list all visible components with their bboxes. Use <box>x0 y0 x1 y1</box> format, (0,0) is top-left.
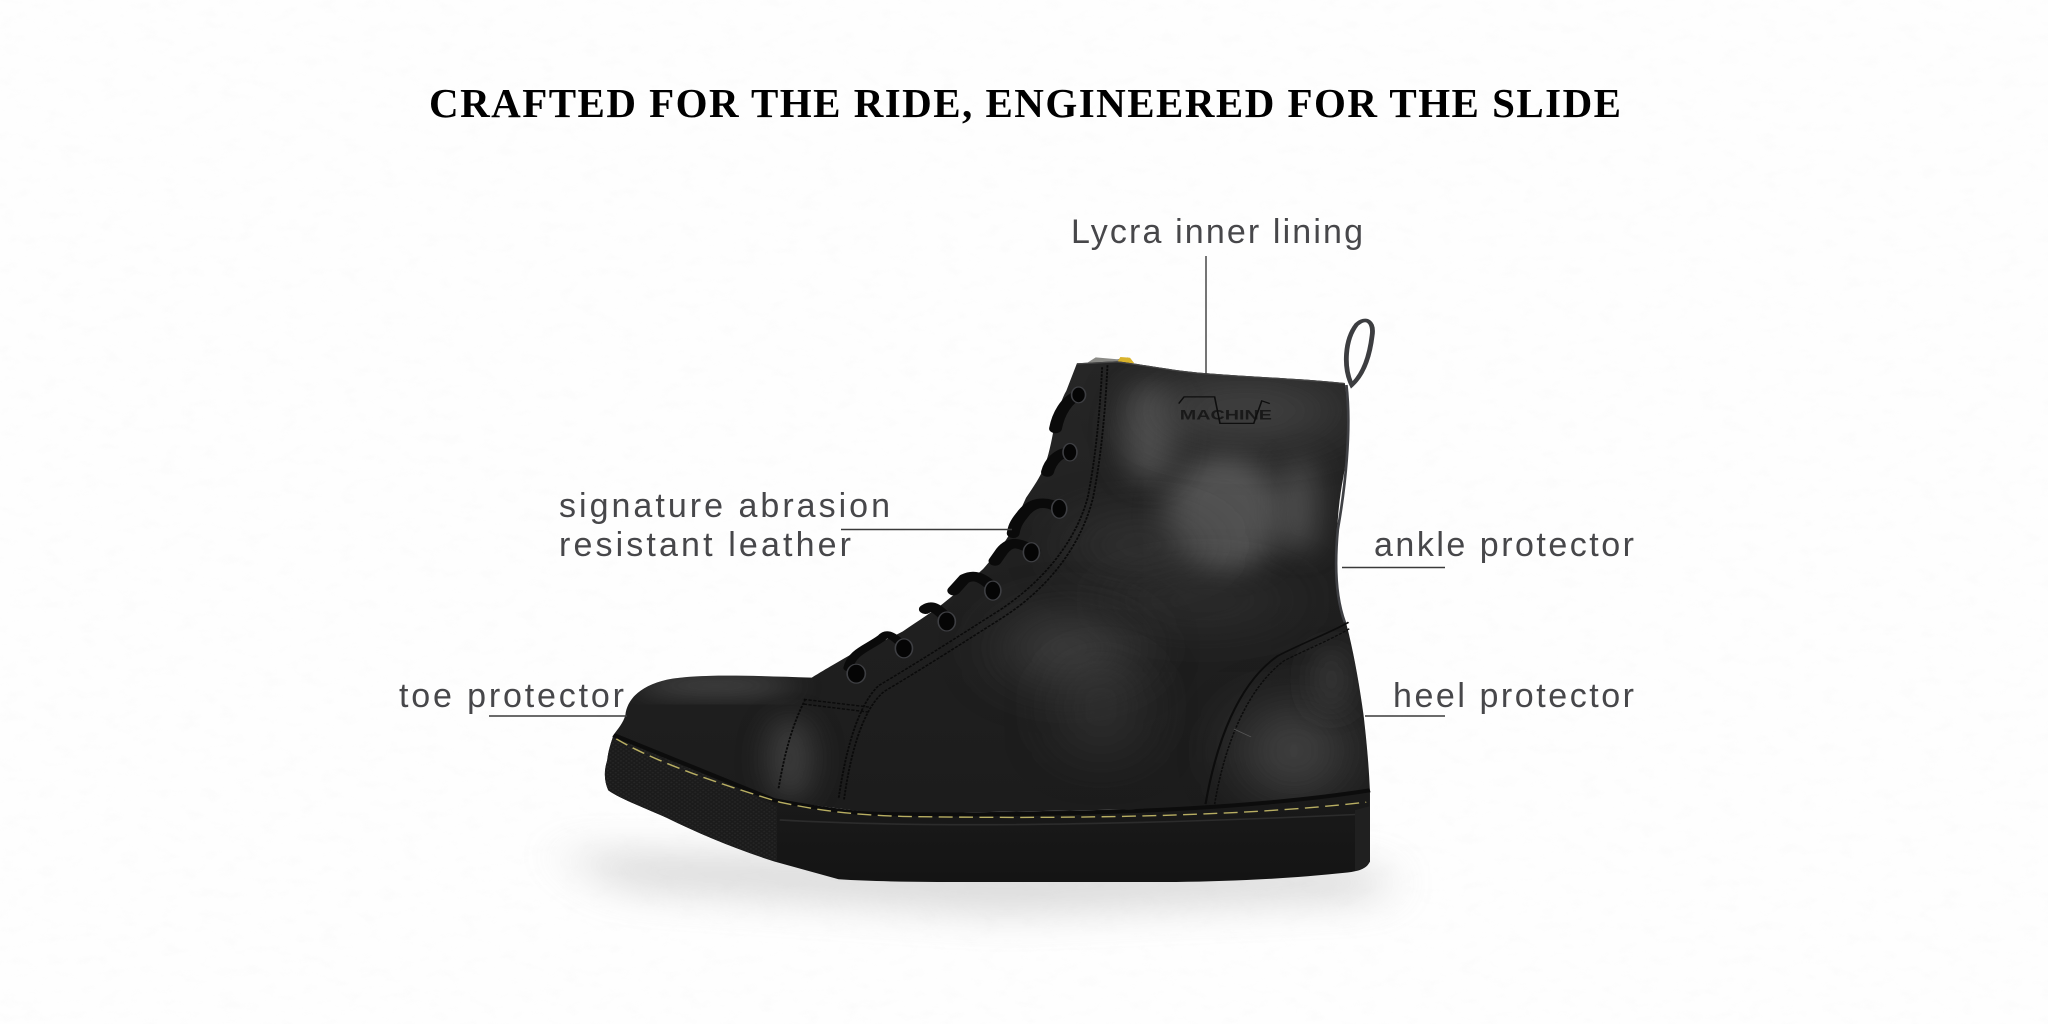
callout: toe protector: toe protector <box>399 677 624 715</box>
sole <box>605 735 1370 882</box>
logo emboss <box>1179 397 1272 423</box>
leather upper <box>614 361 1370 814</box>
ground shadow under boot <box>560 850 1380 915</box>
laces and eyelets <box>847 387 1086 683</box>
welt stitching <box>614 735 1370 817</box>
callout: signature abrasion resistant leather: signature abrasion <box>559 487 890 525</box>
callout: Lycra inner lining: Lycra inner lining <box>1071 213 1363 251</box>
inner lining tag <box>1088 357 1134 363</box>
logo emboss: MACHINE <box>1180 407 1272 423</box>
boot illustration <box>605 320 1372 882</box>
title: CRAFTED FOR THE RIDE, ENGINEERED FOR THE SLIDE <box>429 80 1621 126</box>
heel counter seam <box>1206 622 1350 804</box>
callout: ankle protector: ankle protector <box>1374 526 1634 564</box>
icon: pull loop <box>1346 320 1372 385</box>
callout: signature abrasion resistant leather: resistant leather <box>559 526 851 564</box>
leather highlights <box>635 361 1347 802</box>
eyestay and toe seams <box>779 365 1107 800</box>
callout: signature abrasion resistant leather <box>559 487 1012 564</box>
callout: heel protector: heel protector <box>1393 677 1634 715</box>
